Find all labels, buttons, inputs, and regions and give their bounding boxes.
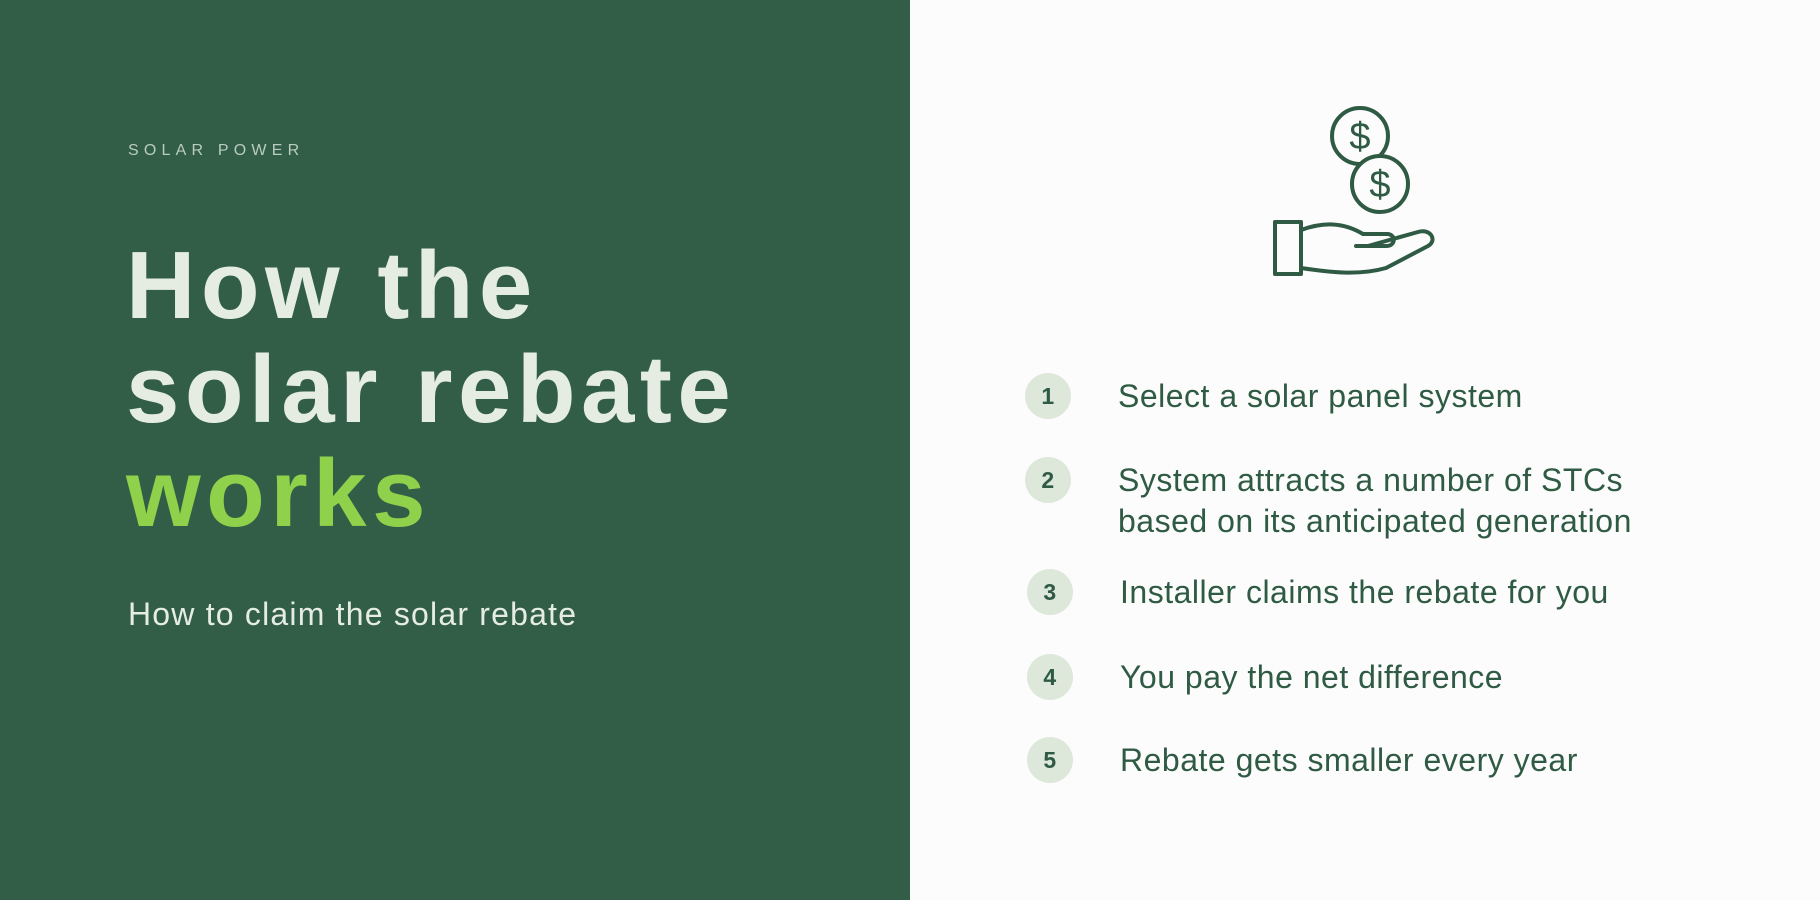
text: Installer claims the rebate for you (1120, 574, 1609, 610)
text: System attracts a number of STCs (1118, 462, 1623, 498)
list step 1 (1025, 373, 1523, 419)
list step 3 (1027, 569, 1609, 615)
icon: hand with coins: $ (1369, 164, 1391, 206)
title: works (126, 440, 431, 547)
text: 2 (1041, 467, 1055, 493)
text: 1 (1041, 383, 1055, 409)
text: 5 (1043, 747, 1057, 773)
icon: hand with coins: $ (1349, 116, 1371, 158)
text: Select a solar panel system (1118, 378, 1523, 414)
subtitle: How to claim the solar rebate (128, 596, 577, 632)
title: solar rebate (126, 336, 736, 443)
text: Rebate gets smaller every year (1120, 742, 1578, 778)
text: 4 (1043, 664, 1057, 690)
list step 5 (1027, 737, 1578, 783)
panel: left (0, 0, 910, 900)
icon: hand with coins (1273, 106, 1435, 276)
eyebrow: SOLAR POWER (128, 142, 304, 159)
list step 2 (1025, 457, 1632, 539)
text: You pay the net difference (1120, 659, 1503, 695)
title (126, 232, 736, 547)
text: 3 (1043, 579, 1057, 605)
list step 4 (1027, 654, 1503, 700)
title: How the (126, 232, 538, 339)
text: based on its anticipated generation (1118, 503, 1632, 539)
